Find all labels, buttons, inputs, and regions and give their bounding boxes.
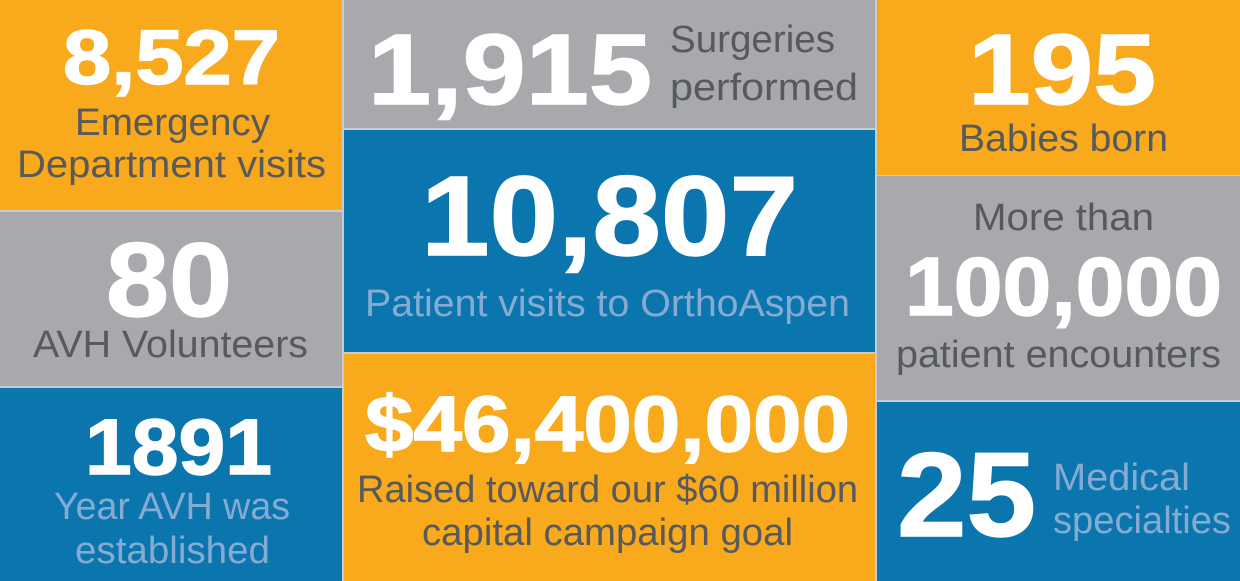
panel: OrthoAspen patient visits [344, 130, 875, 352]
panel: AVH volunteers [0, 212, 342, 386]
label: specialties: specialties [1053, 500, 1231, 542]
stat: 100,000: 100,000 [905, 240, 1222, 333]
stat: 8,527: 8,527 [63, 15, 280, 101]
panel: patient encounters [877, 176, 1240, 400]
stat: $46,400,000: $46,400,000 [365, 379, 850, 468]
stat: 10,807: 10,807 [421, 153, 798, 279]
stat: 25: 25 [897, 428, 1036, 562]
label: Surgeries: Surgeries [670, 19, 835, 61]
label: Patient visits to OrthoAspen: Patient visits to OrthoAspen [365, 283, 850, 325]
panel: surgeries performed [344, 0, 875, 128]
stat: 1891: 1891 [85, 402, 272, 491]
label: Year AVH was: Year AVH was [54, 486, 290, 528]
panel: year established [0, 388, 342, 581]
label: Babies born: Babies born [959, 118, 1168, 160]
label: More than: More than [973, 197, 1154, 239]
label: AVH Volunteers: AVH Volunteers [33, 324, 308, 366]
panel: babies born [877, 0, 1240, 175]
panel: emergency department visits [0, 0, 342, 210]
stat: 80: 80 [106, 222, 232, 339]
label: established: established [75, 530, 270, 572]
label: Emergency: Emergency [75, 102, 270, 144]
label: capital campaign goal: capital campaign goal [422, 512, 793, 554]
panel: capital campaign [344, 354, 875, 581]
panel: medical specialties [877, 402, 1240, 581]
stat: 195: 195 [968, 14, 1156, 126]
label: performed: performed [670, 67, 858, 109]
label: patient encounters: patient encounters [896, 334, 1221, 376]
label: Department visits: Department visits [17, 144, 326, 186]
label: Raised toward our $60 million: Raised toward our $60 million [357, 469, 858, 511]
label: Medical: Medical [1053, 457, 1190, 499]
stat: 1,915: 1,915 [368, 14, 652, 126]
